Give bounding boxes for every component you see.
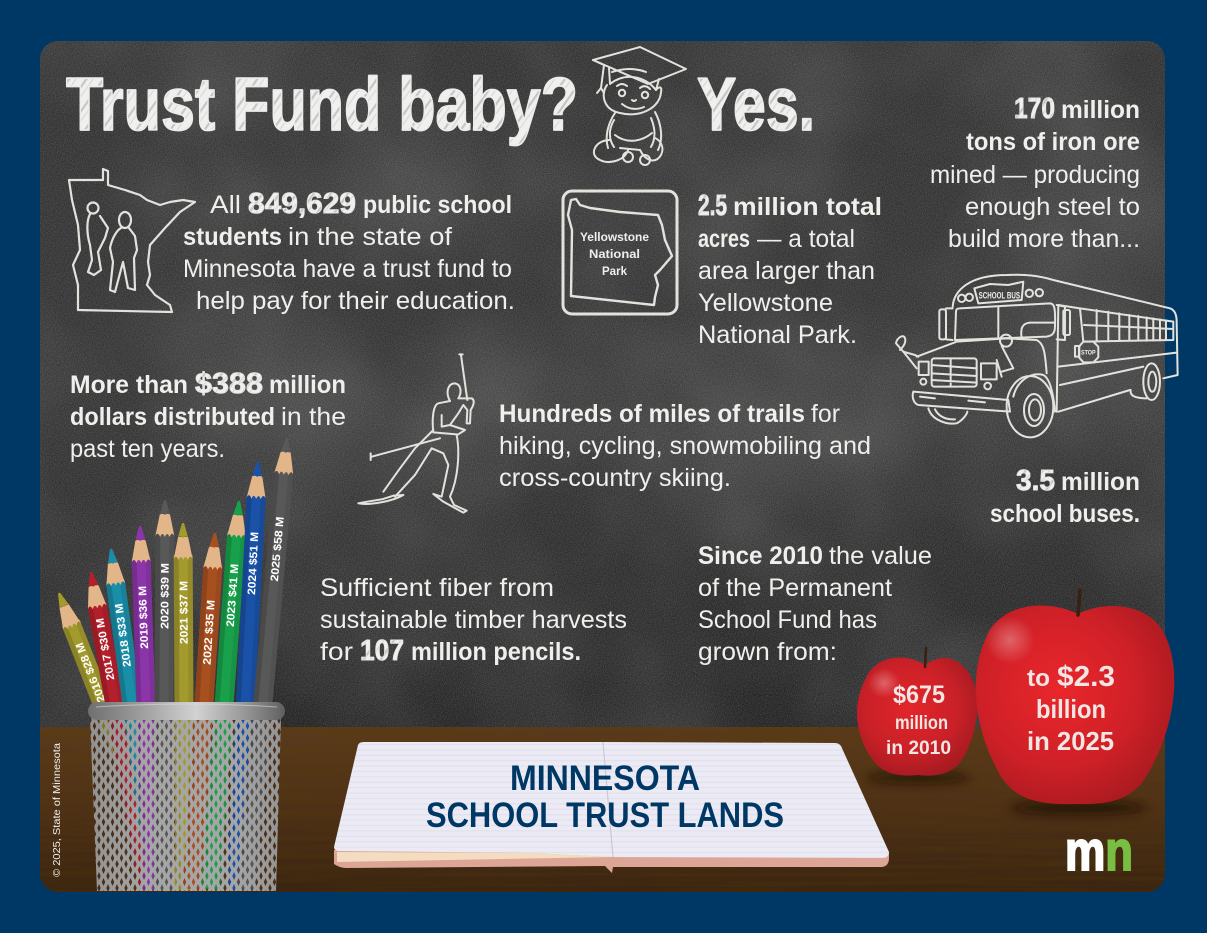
apple: $2.3 billion in 2025: to: [1027, 665, 1050, 692]
text: students: public school: [363, 191, 512, 219]
text: pencils: million pencils.: [411, 638, 581, 666]
chart: pencils by year: [50, 437, 296, 892]
text: trails: Hundreds of miles of trails: [499, 400, 805, 428]
text: trails: for: [811, 400, 840, 428]
apple: $2.3 billion in 2025: $2.3: [1057, 661, 1115, 693]
pencil 2016: [50, 589, 184, 892]
text: dollars distributed: in the: [281, 403, 346, 431]
text: acres: 2.5: [698, 190, 727, 222]
title: Trust Fund baby?: [66, 62, 578, 146]
text: acres: area larger than: [698, 257, 875, 285]
text: school buses: [990, 465, 1140, 528]
text: iron ore: build more than...: [948, 225, 1140, 253]
icon: school bus: SCHOOL BUS: [979, 291, 1020, 301]
text: iron ore: mined — producing: [930, 161, 1140, 189]
pencil 2017: 2017 $30 M: [94, 617, 117, 681]
pencil 2021: 2021 $37 M: [178, 581, 191, 644]
text: acres: acres: [698, 225, 750, 253]
text: dollars distributed: million: [269, 371, 346, 399]
apple: $675 million in 2010: [857, 648, 978, 784]
pencil 2021: [173, 523, 194, 890]
text: trails: cross-country skiing.: [499, 464, 731, 492]
pencil cup: [85, 702, 285, 893]
text: pencils: Sufficient fiber from: [320, 574, 554, 602]
pencil 2020: [153, 500, 175, 890]
text: iron ore: enough steel to: [965, 193, 1140, 221]
text: students: Minnesota have a trust fund to: [183, 255, 512, 283]
logo: mn: mn: [1065, 819, 1133, 882]
pencil 2016: 2016 $28 M: [74, 641, 108, 704]
text: acres: million total: [733, 193, 882, 221]
text: iron ore: million: [1061, 96, 1140, 124]
text: students: help pay for their education.: [196, 287, 515, 315]
text: Permanent School Fund: Since 2010: [698, 542, 823, 570]
text: dollars distributed: More than: [70, 371, 188, 399]
pencil 2024: 2024 $51 M: [246, 532, 261, 595]
pencil 2017: [82, 570, 157, 891]
text: trails: [499, 400, 871, 492]
icon: Yellowstone National Park outline: Yellowstone: [580, 230, 649, 244]
cup interior: [90, 718, 281, 891]
pencil 2023: 2023 $41 M: [225, 563, 241, 627]
icon: Minnesota outline with students: [69, 169, 195, 312]
text: pencils: for: [320, 638, 353, 666]
pencil 2019: [131, 526, 162, 890]
icon: Yellowstone National Park outline: National: [589, 247, 640, 261]
apple: $2.3 billion in 2025: [976, 590, 1174, 815]
text: Permanent School Fund: School Fund has: [698, 606, 877, 634]
icon: Yellowstone National Park outline: [563, 191, 677, 314]
apple: $2.3 billion in 2025: in 2025: [1027, 726, 1114, 756]
title: Yes.: [697, 62, 815, 146]
text: students: in the state of: [288, 223, 452, 251]
text: acres: Yellowstone: [698, 289, 833, 317]
text: iron ore: tons of iron ore: [966, 128, 1140, 156]
apple: $675 million in 2010: $675: [893, 681, 945, 709]
text: Permanent School Fund: the value: [829, 542, 932, 570]
text: students: All: [210, 191, 241, 219]
text: school buses: school buses.: [990, 500, 1140, 528]
text: Permanent School Fund: grown from:: [698, 638, 837, 666]
text: dollars distributed: past ten years.: [70, 435, 225, 463]
open book with heading: [334, 742, 889, 873]
pencil 2022: [182, 532, 224, 890]
text: school buses: 3.5: [1016, 465, 1055, 497]
text: students: 849,629: [248, 188, 356, 220]
pencil 2019: 2019 $36 M: [137, 586, 151, 649]
text: trails: hiking, cycling, snowmobiling and: [499, 432, 871, 460]
pencil 2023: [201, 500, 248, 890]
text: acres: — a total: [757, 225, 855, 253]
open book with heading: SCHOOL TRUST LANDS: [426, 796, 784, 835]
text: dollars distributed: [70, 368, 346, 463]
icon: Yellowstone National Park outline: Park: [602, 264, 627, 278]
text: school buses: million: [1061, 468, 1140, 496]
text: dollars distributed: dollars distributed: [70, 403, 275, 431]
text: pencils: [320, 574, 627, 667]
icon: school bus: STOP: [1081, 349, 1096, 356]
apple: $2.3 billion in 2025: billion: [1036, 694, 1106, 724]
text: iron ore: 170: [1014, 93, 1055, 125]
pencil 2018: 2018 $33 M: [113, 603, 134, 668]
text: Permanent School Fund: of the Permanent: [698, 574, 892, 602]
icon: school bus: [896, 275, 1178, 437]
text: pencils: sustainable timber harvests: [320, 606, 627, 634]
pencil 2020: 2020 $39 M: [159, 563, 172, 629]
wooden desk: [40, 727, 1165, 892]
pencil 2018: [102, 548, 166, 890]
open book with heading: MINNESOTA: [510, 759, 700, 798]
pencil 2022: 2022 $35 M: [201, 600, 218, 665]
text: iron ore: [930, 93, 1140, 253]
pencil 2025: [236, 437, 296, 890]
copyright: © 2025, State of Minnesota: [51, 743, 63, 877]
text: students: [183, 188, 515, 315]
text: dollars distributed: $388: [195, 368, 263, 400]
text: acres: [698, 190, 882, 349]
text: students: students: [183, 223, 282, 251]
icon: cross-country skier: [358, 354, 474, 513]
chalkboard: [40, 41, 1165, 728]
text: pencils: 107: [360, 635, 404, 667]
apple: $675 million in 2010: million: [895, 713, 948, 734]
pencil 2024: [226, 461, 267, 890]
apple: $675 million in 2010: in 2010: [886, 738, 951, 759]
text: acres: National Park.: [698, 321, 857, 349]
pencil 2025: 2025 $58 M: [269, 516, 287, 582]
text: Permanent School Fund: [698, 542, 932, 666]
icon: baby in graduation cap: [593, 47, 686, 165]
